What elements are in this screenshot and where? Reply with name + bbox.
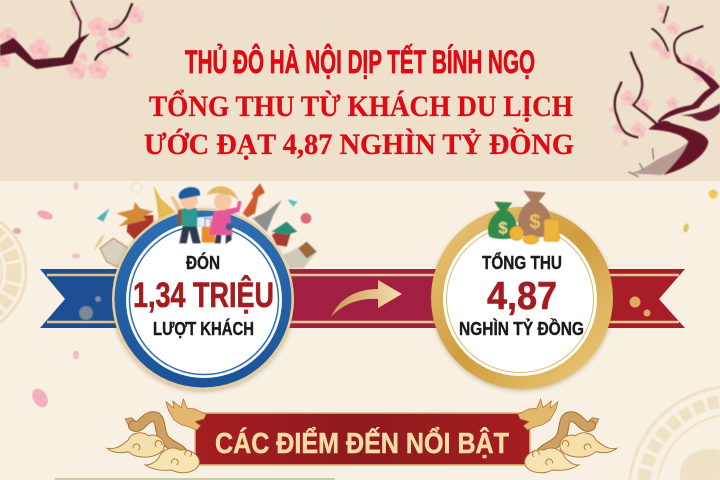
blue ring xyxy=(114,210,292,388)
ribbon: red centre band xyxy=(285,269,440,328)
number: revenue: 4,87 xyxy=(487,275,557,318)
white disc xyxy=(126,222,282,378)
icon: golden tower xyxy=(153,185,175,219)
coins xyxy=(510,219,559,244)
section banner xyxy=(107,399,617,473)
ribbon: blue left tail xyxy=(40,269,125,328)
label: welcome: ĐÓN xyxy=(186,252,220,273)
label: revenue: TỔNG THU xyxy=(482,252,562,273)
boy xyxy=(170,187,201,243)
icon: gate left xyxy=(100,238,128,267)
page background xyxy=(0,181,720,480)
meander medallion right xyxy=(630,387,720,480)
title line 1: THỦ ĐÔ HÀ NỘI DỊP TẾT BÍNH NGỌ xyxy=(185,44,535,80)
header background xyxy=(0,0,720,181)
title line 3: ƯỚC ĐẠT 4,87 NGHÌN TỶ ĐỒNG xyxy=(144,127,574,161)
icon: small plane xyxy=(287,199,297,207)
arrow xyxy=(331,280,402,317)
dragon right xyxy=(518,399,617,473)
meander medallion left xyxy=(0,211,26,333)
title xyxy=(144,44,574,161)
icon: dotted circle xyxy=(132,182,142,192)
number: visitors: 1,34 TRIỆU xyxy=(133,275,274,315)
icon: red tower xyxy=(243,183,265,217)
gold ring xyxy=(431,207,613,389)
green bag: $ xyxy=(498,218,508,237)
icon: balloon xyxy=(301,213,311,224)
icon: gate right xyxy=(283,242,317,268)
banner body xyxy=(195,413,530,465)
label: visits: LƯỢT KHÁCH xyxy=(153,318,254,339)
visitor circle xyxy=(112,208,294,390)
icon: pagoda left xyxy=(117,202,153,240)
petals and small flowers xyxy=(13,182,718,410)
gold rim xyxy=(112,208,294,390)
suitcase xyxy=(197,216,216,243)
next panel top edge xyxy=(55,478,335,480)
brown bag: $ xyxy=(529,211,540,233)
icon: plane left xyxy=(97,208,109,222)
icon: money bags and coins xyxy=(488,191,559,244)
icon: gold plane xyxy=(93,233,105,252)
ribbon: red right tail xyxy=(605,269,685,328)
girl xyxy=(207,186,242,244)
banner heading: CÁC ĐIỂM ĐẾN NỔI BẬT xyxy=(215,426,509,460)
icon: grey pagoda xyxy=(253,200,282,232)
landmarks behind visitor circle xyxy=(93,182,317,268)
label: unit: NGHÌN TỶ ĐỒNG xyxy=(459,318,584,339)
plum blossom branch right xyxy=(608,3,720,177)
white disc xyxy=(443,222,597,376)
icon: red temple xyxy=(272,230,292,247)
plum blossom branch left xyxy=(0,1,145,79)
icon: two travellers xyxy=(170,186,242,244)
title line 2: TỔNG THU TỪ KHÁCH DU LỊCH xyxy=(149,89,573,123)
dragon left xyxy=(107,399,206,473)
revenue circle xyxy=(431,207,613,389)
